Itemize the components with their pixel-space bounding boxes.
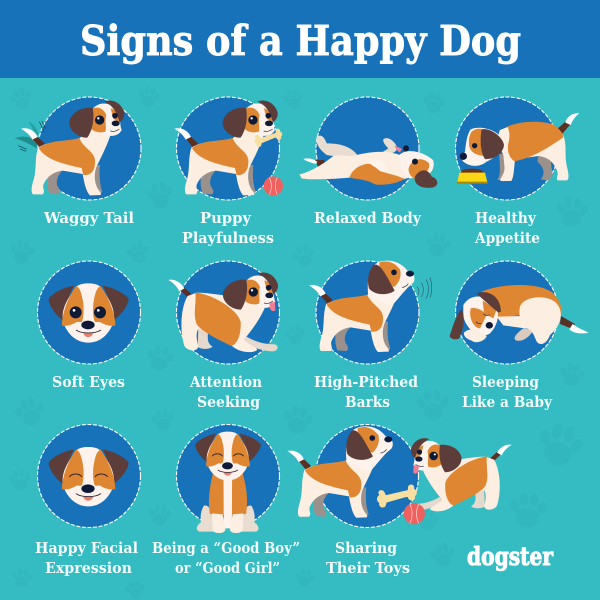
label: Sleeping <box>472 373 539 391</box>
logo: dogster: dogster <box>467 542 554 571</box>
bone toy <box>376 484 418 508</box>
older dog looking up <box>287 426 393 518</box>
dog face with soft eyes <box>49 283 129 343</box>
sitting dog illustration <box>195 432 261 533</box>
label: Seeking <box>197 393 260 411</box>
label: Being a “Good Boy” <box>152 539 300 557</box>
panel: good boy or good girl <box>152 424 300 577</box>
label: Soft Eyes <box>52 373 125 391</box>
label <box>474 209 540 247</box>
barking dog illustration <box>309 261 432 352</box>
play-bowing dog illustration <box>168 273 278 352</box>
label <box>152 539 300 577</box>
dog wagging tail illustration <box>15 101 124 195</box>
panel: high-pitched barks <box>309 261 432 411</box>
label: or “Good Girl” <box>175 559 280 577</box>
panel: relaxed body <box>299 97 437 227</box>
dog with bone and ball illustration <box>174 101 284 196</box>
label: Expression <box>45 559 132 577</box>
panel: waggy tail <box>15 97 141 227</box>
label: Like a Baby <box>462 393 553 411</box>
label <box>314 373 418 411</box>
label <box>35 539 138 577</box>
ball toy <box>404 503 425 524</box>
label: Healthy <box>475 209 537 227</box>
panel: soft eyes <box>38 261 140 391</box>
label: Happy Facial <box>35 539 138 557</box>
panel: sleeping like a baby <box>450 261 589 411</box>
label: High-Pitched <box>314 373 418 391</box>
label <box>182 209 274 247</box>
label: Playfulness <box>182 229 274 247</box>
title banner: Signs of a Happy Dog <box>80 17 521 65</box>
label: Their Toys <box>326 559 410 577</box>
dog rolling on back illustration <box>299 136 437 188</box>
label: Relaxed Body <box>314 209 422 227</box>
label: Waggy Tail <box>43 209 134 227</box>
title banner <box>0 0 600 78</box>
dog eating from bowl illustration <box>457 113 579 184</box>
label: Attention <box>189 373 262 391</box>
label <box>462 373 553 411</box>
label: Puppy <box>200 209 252 227</box>
label: Appetite <box>474 229 540 247</box>
label: Sharing <box>335 539 397 557</box>
label <box>326 539 410 577</box>
panel: puppy playfulness <box>174 97 284 247</box>
label <box>189 373 262 411</box>
panel: sharing their toys <box>287 424 512 577</box>
panel: attention seeking <box>168 261 280 411</box>
sleeping dog illustration <box>450 285 589 344</box>
happy dog face illustration <box>49 447 129 506</box>
puppy in play bow <box>411 438 512 511</box>
label: Barks <box>345 393 390 411</box>
panel: healthy appetite <box>456 97 579 247</box>
panel: happy facial expression <box>35 424 140 577</box>
